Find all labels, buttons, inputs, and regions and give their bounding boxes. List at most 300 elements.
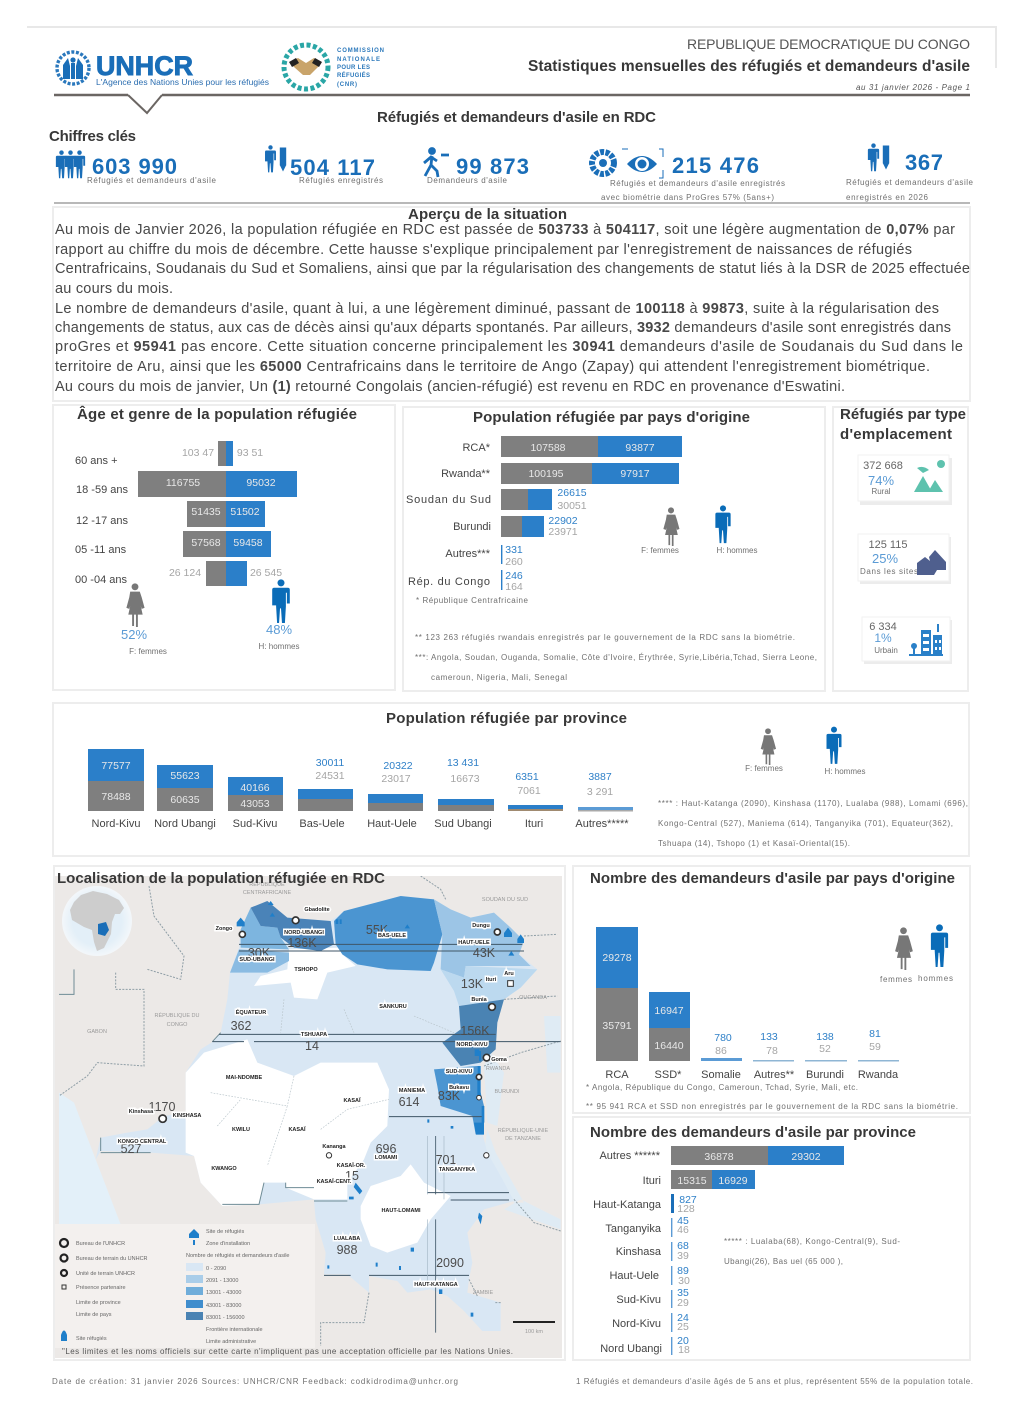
refugee count labels: 30K bbox=[248, 946, 271, 960]
refugee count labels: 1170 bbox=[149, 1100, 175, 1114]
stacked bar chart: Nord Ubangi bbox=[600, 1343, 662, 1355]
card: rural: 74% bbox=[868, 473, 894, 488]
stacked bar chart: 30 bbox=[678, 1275, 690, 1287]
logo: UNHCR: UNHCR bbox=[96, 51, 193, 81]
text block: changements de status, aux cas de décès ainsi qu'aux départs spontanés. Par ailleurs, 3932 demandeurs d'asile sont enregistrés dans bbox=[55, 320, 951, 336]
stacked column chart: 29278 bbox=[602, 952, 632, 964]
stacked column chart: 59 bbox=[869, 1041, 881, 1053]
stacked column chart: Autres** bbox=[754, 1069, 795, 1081]
stacked column chart: Sud-Kivu bbox=[233, 818, 277, 830]
stacked bar chart: 35 bbox=[677, 1287, 689, 1299]
stacked bar chart: 246 bbox=[505, 570, 523, 582]
stacked bar chart: 15315 bbox=[677, 1175, 707, 1187]
stacked column chart: 138 bbox=[816, 1031, 834, 1043]
stacked column chart: Burundi bbox=[806, 1069, 844, 1081]
stacked bar chart: RCA* bbox=[462, 442, 491, 454]
kpi: registered in 2026: enregistrés en 2026 bbox=[846, 193, 929, 202]
legend icons bbox=[641, 505, 757, 555]
stacked bar chart: 128 bbox=[677, 1203, 695, 1215]
logo: commission nationale pour les réfugiés: (CNR) bbox=[337, 82, 357, 88]
stacked bar chart: Haut-Katanga bbox=[593, 1199, 662, 1211]
stacked column chart: 52 bbox=[819, 1043, 831, 1055]
stacked column chart: 60635 bbox=[170, 794, 200, 806]
text block: Au mois de Janvier 2026, la population réfugiée en RDC est passée de 503733 à 504117, soit une légère augmentation de 0,07% par bbox=[55, 222, 955, 238]
footnote: Kongo-Central (527), Maniema (614), Tanganyika (701), Equateur(362), bbox=[658, 819, 953, 828]
province labels: Goma bbox=[491, 1057, 508, 1063]
footer: sources: Date de création: 31 janvier 2026 Sources: UNHCR/CNR Feedback: codkidrodima@unhcr.org bbox=[52, 1377, 458, 1386]
share labels bbox=[121, 622, 299, 656]
header titles: Statistiques mensuelles des réfugiés et demandeurs d'asile bbox=[528, 58, 970, 75]
refugee count labels: 614 bbox=[399, 1095, 419, 1109]
frontier strokes bbox=[59, 969, 347, 1204]
logo: commission nationale pour les réfugiés: RÉFUGIÉS bbox=[337, 71, 370, 79]
legend icons: H: hommes bbox=[825, 767, 865, 776]
stacked column chart: 40166 bbox=[240, 782, 270, 794]
stacked bar chart: Rwanda** bbox=[441, 468, 491, 480]
pyramid chart: 116755 bbox=[166, 477, 200, 489]
text block: territoire de Aru, ainsi que les 65000 Centrafricains dans le territoire de Ango (Zapay) qui attendent l'enregistrement biométrique. bbox=[55, 359, 930, 375]
legend icons: hommes bbox=[918, 974, 953, 983]
legend: Bureau de terrain du UNHCR bbox=[76, 1256, 148, 1262]
neighbouring country labels: OUGANDA bbox=[519, 995, 547, 1001]
stacked column chart: 55623 bbox=[170, 770, 200, 782]
province labels: Bukavu bbox=[449, 1085, 469, 1091]
pyramid chart: 103 47 bbox=[182, 447, 214, 459]
heading: d'emplacement bbox=[840, 426, 952, 443]
province labels: HAUT-LOMAMI bbox=[381, 1208, 421, 1214]
pyramid chart: 51435 bbox=[191, 506, 221, 518]
stacked column chart: 78488 bbox=[101, 791, 131, 803]
legend: Site de réfugiés bbox=[206, 1229, 244, 1235]
legend: Zone d'installation bbox=[206, 1241, 250, 1247]
stacked bar chart: 29302 bbox=[791, 1151, 821, 1163]
legend icons bbox=[745, 727, 865, 776]
neighbouring country labels: RWANDA bbox=[486, 1066, 510, 1072]
heading: chiffres clés: Chiffres clés bbox=[49, 128, 136, 145]
text block: Le nombre de demandeurs d'asile, quant à lui, a une légèrement diminué, passant de 100118 à 99873, suite à la régularisation des bbox=[55, 301, 939, 317]
stacked bar chart: 45 bbox=[677, 1215, 689, 1227]
card: rural: 372 668 bbox=[863, 460, 903, 472]
legend: 83001 - 156000 bbox=[206, 1315, 245, 1321]
icon: city bbox=[909, 624, 943, 656]
province labels: SUD-KIVU bbox=[446, 1069, 472, 1075]
kpi: biometric registration: Réfugiés et demandeurs d'asile enregistrés bbox=[610, 179, 785, 188]
panel: asylum seekers by province bbox=[573, 1117, 970, 1360]
heading: Réfugiés par type bbox=[840, 406, 966, 423]
refugee count labels: 2090 bbox=[436, 1256, 464, 1270]
footnotes: * République Centrafricaine bbox=[416, 596, 529, 605]
province labels: KASAÏ bbox=[343, 1097, 361, 1104]
province labels: MAI-NDOMBE bbox=[226, 1075, 263, 1081]
stacked column chart: 77577 bbox=[101, 760, 131, 772]
stacked bar chart: 23971 bbox=[548, 526, 578, 538]
legend: Unité de terrain UNHCR bbox=[76, 1271, 135, 1277]
province labels: KASAÏ-CENT. bbox=[317, 1178, 352, 1185]
heading: Localisation de la population réfugiée en RDC bbox=[57, 870, 385, 887]
kpi: registered refugees: Réfugiés enregistrés bbox=[299, 176, 383, 185]
legend: Site réfugiés bbox=[76, 1336, 107, 1342]
pyramid chart: 59458 bbox=[233, 537, 263, 549]
stacked bar chart: Sud-Kivu bbox=[616, 1294, 661, 1306]
legend: 43001 - 83000 bbox=[206, 1303, 241, 1309]
stacked bar chart: 260 bbox=[505, 556, 523, 568]
pyramid chart: 05 -11 ans bbox=[75, 544, 127, 556]
stacked column chart: 13 431 bbox=[447, 757, 479, 769]
legend: Nombre de réfugiés et demandeurs d'asile bbox=[186, 1253, 289, 1259]
heading bbox=[840, 406, 966, 443]
ocean and lakes bbox=[59, 1093, 121, 1224]
logo: UNHCR bbox=[57, 51, 269, 87]
province labels: TSHOPO bbox=[294, 967, 318, 973]
text block: rapport au chiffre du mois de décembre. Cette hausse s'explique principalement par l'enregistrement de naissances de réfugiés bbox=[55, 242, 912, 258]
logo: commission nationale pour les réfugiés bbox=[284, 45, 384, 89]
stacked bar chart: Soudan du Sud bbox=[406, 494, 491, 506]
sites markers bbox=[237, 901, 524, 1317]
legend icons: femmes bbox=[880, 975, 912, 984]
share labels: H: hommes bbox=[259, 642, 299, 651]
kpi: refugees and asylum seekers: 603 990 bbox=[92, 154, 177, 179]
stacked column chart: 35791 bbox=[602, 1020, 632, 1032]
province labels: HAUT-UELE bbox=[458, 940, 490, 946]
leader lines bbox=[212, 944, 561, 1333]
neighbouring country labels: ZAMBIE bbox=[473, 1290, 494, 1296]
legend bbox=[55, 1224, 555, 1348]
pyramid chart bbox=[75, 441, 297, 586]
kpi: asylum seekers: 99 873 bbox=[456, 154, 529, 179]
stacked bar chart: 25 bbox=[677, 1321, 689, 1333]
province labels: KWILU bbox=[232, 1127, 250, 1133]
legend: 13001 - 43000 bbox=[206, 1290, 241, 1296]
text block: proGres et 95941 pas encore. Cette situation concerne principalement les 30941 demandeurs d'asile de Soudanais du Sud dans le bbox=[55, 339, 963, 355]
icon: walking person and arrow bbox=[424, 148, 449, 177]
footer: note: 1 Réfugiés et demandeurs d'asile âgés de 5 ans et plus, représentent 55% de la population totale. bbox=[576, 1377, 973, 1386]
stacked column chart: 24531 bbox=[315, 770, 345, 782]
province labels: Gbadolite bbox=[304, 907, 330, 913]
province labels: Ituri bbox=[486, 977, 497, 983]
footnote bbox=[658, 799, 968, 848]
legend: 2091 - 13000 bbox=[206, 1278, 238, 1284]
stacked bar chart: 46 bbox=[677, 1224, 689, 1236]
pyramid chart: 26 545 bbox=[250, 567, 282, 579]
refugee count labels: 13K bbox=[461, 977, 484, 991]
kpi: asylum seekers: Demandeurs d'asile bbox=[427, 176, 508, 185]
stacked bar chart bbox=[406, 436, 682, 593]
footnotes: ** 123 263 réfugiés rwandais enregistrés par le gouvernement de la RDC sans la biométrie. bbox=[415, 633, 795, 642]
legend: Limite administrative bbox=[206, 1339, 256, 1345]
map bbox=[55, 876, 562, 1358]
stacked column chart: 16673 bbox=[450, 773, 480, 785]
province labels: Dungu bbox=[472, 923, 490, 929]
refugee count labels: 701 bbox=[436, 1153, 456, 1167]
legend: 0 - 2090 bbox=[206, 1266, 226, 1272]
province labels: SUD-UBANGI bbox=[239, 957, 275, 963]
panel: by location type bbox=[833, 406, 968, 691]
refugee count labels: 15 bbox=[345, 1169, 359, 1183]
kpi: registered in 2026: Réfugiés et demandeurs d'asile bbox=[846, 178, 974, 187]
neighbouring country labels: DE TANZANIE bbox=[505, 1136, 541, 1142]
province labels: KONGO CENTRAL bbox=[118, 1139, 167, 1145]
pyramid chart: 95032 bbox=[246, 477, 276, 489]
legend icons: H: hommes bbox=[717, 546, 757, 555]
province labels: KASAÏ bbox=[288, 1126, 306, 1133]
stacked bar chart: Burundi bbox=[453, 521, 491, 533]
stacked column chart: Ituri bbox=[525, 818, 543, 830]
province labels: TSHUAPA bbox=[301, 1032, 327, 1038]
header titles: au 31 janvier 2026 - Page 1 bbox=[856, 83, 970, 92]
refugee count labels bbox=[121, 923, 496, 1270]
heading: Population réfugiée par pays d'origine bbox=[473, 409, 750, 426]
globe inset bbox=[62, 886, 132, 956]
province labels: BAS-UELE bbox=[378, 933, 406, 939]
refugee count labels: 696 bbox=[376, 1142, 396, 1156]
panel: age and gender bbox=[53, 405, 395, 690]
stacked column chart: 16947 bbox=[654, 1005, 684, 1017]
heading: Aperçu de la situation bbox=[408, 206, 567, 223]
stacked column chart: RCA bbox=[605, 1069, 629, 1081]
legend: Limite de pays bbox=[76, 1312, 112, 1318]
stacked column chart: 133 bbox=[760, 1031, 778, 1043]
pyramid chart: 93 51 bbox=[237, 447, 263, 459]
logo: UNHCR: L'Agence des Nations Unies pour les réfugiés bbox=[96, 77, 269, 87]
neighbouring country labels: SOUDAN DU SUD bbox=[482, 897, 528, 903]
panel: asylum seekers by origin bbox=[573, 866, 970, 1113]
stacked column chart: 7061 bbox=[517, 785, 541, 797]
stacked bar chart: 331 bbox=[505, 544, 523, 556]
pyramid chart: 51502 bbox=[230, 506, 260, 518]
footnote bbox=[724, 1237, 900, 1266]
neighbouring country labels: CENTRAFRICAINE bbox=[243, 890, 291, 896]
logo: commission nationale pour les réfugiés: COMMISSION bbox=[337, 48, 384, 54]
subtitle: Réfugiés et demandeurs d'asile en RDC bbox=[377, 109, 656, 126]
country bbox=[96, 896, 537, 1331]
text block: Au cours du mois de janvier, Un (1) retourné Congolais (ancien-réfugié) est revenu en RDC en provenance d'Eswatini. bbox=[55, 379, 845, 395]
stacked bar chart: 100195 bbox=[528, 468, 564, 480]
neighbouring country labels bbox=[87, 881, 549, 1296]
province labels bbox=[118, 907, 514, 1288]
stacked column chart: 23017 bbox=[381, 773, 411, 785]
kpi: biometric registration: avec biométrie dans ProGres 57% (5ans+) bbox=[601, 193, 774, 202]
kpi: registered in 2026: 367 bbox=[905, 150, 943, 175]
icon: person and pencil bbox=[265, 145, 286, 172]
province labels: KINSHASA bbox=[173, 1113, 201, 1119]
province labels: KASAÏ-OR. bbox=[337, 1162, 366, 1169]
icon: group of people bbox=[56, 150, 85, 178]
pyramid chart: 60 ans + bbox=[75, 455, 118, 467]
share labels: F: femmes bbox=[129, 647, 167, 656]
province labels: MANIEMA bbox=[399, 1088, 425, 1094]
neighbouring country labels: BURUNDI bbox=[494, 1089, 520, 1095]
card: sites: 125 115 bbox=[869, 539, 907, 551]
pyramid chart: 12 -17 ans bbox=[76, 515, 128, 527]
province labels: NORD-KIVU bbox=[456, 1042, 488, 1048]
stacked column chart: Nord Ubangi bbox=[154, 818, 216, 830]
footnote: Tshuapa (14), Tshopo (1) et Kasaï-Oriental(15). bbox=[658, 839, 850, 848]
stacked column chart: 3887 bbox=[588, 771, 612, 783]
stacked column chart: SSD* bbox=[655, 1069, 682, 1081]
card: urban: 6 334 bbox=[869, 621, 897, 633]
borders bbox=[59, 876, 561, 1346]
kpi: biometric registration bbox=[592, 149, 785, 202]
province labels: Kananga bbox=[322, 1144, 347, 1150]
stacked bar chart: 89 bbox=[677, 1265, 689, 1277]
card: sites bbox=[858, 534, 951, 584]
legend icons bbox=[880, 924, 953, 984]
heading: Nombre des demandeurs d'asile par province bbox=[590, 1124, 916, 1141]
footnote: ***** : Lualaba(68), Kongo-Central(9), Sud- bbox=[724, 1237, 900, 1246]
stacked column chart: Nord-Kivu bbox=[92, 818, 140, 830]
legend icons: F: femmes bbox=[641, 546, 679, 555]
stacked bar chart: 827 bbox=[679, 1194, 697, 1206]
stacked bar chart: Autres*** bbox=[445, 548, 491, 560]
footnotes bbox=[415, 596, 817, 682]
stacked column chart: 16440 bbox=[654, 1040, 684, 1052]
refugee count labels: 83K bbox=[438, 1089, 461, 1103]
header titles: REPUBLIQUE DEMOCRATIQUE DU CONGO bbox=[687, 36, 970, 52]
card: urban bbox=[862, 617, 952, 664]
panel: refugees by province bbox=[53, 703, 969, 856]
footnote: Ubangi(26), Bas uel (65 000 ), bbox=[724, 1257, 843, 1266]
footnotes: ** 95 941 RCA et SSD non enregistrés par le gouvernement de la RDC sans la biométrie. bbox=[586, 1102, 958, 1111]
province labels: Bunia bbox=[471, 997, 488, 1003]
icon: woman bbox=[126, 583, 145, 627]
legend: Limite de province bbox=[76, 1300, 121, 1306]
kpi: registered refugees: 504 117 bbox=[290, 155, 375, 180]
page frame bbox=[27, 27, 996, 68]
stacked bar chart: Rép. du Congo bbox=[408, 576, 490, 588]
province labels: LOMAMI bbox=[375, 1155, 398, 1161]
stacked column chart: 78 bbox=[766, 1045, 778, 1057]
neighbouring country labels: RÉPUBLIQUE bbox=[249, 881, 285, 888]
text block: Centrafricains, Soudanais du Sud et Somaliens, ainsi que par la régularisation des changements de statut liés à la DSR de 2025 effectuée bbox=[55, 261, 970, 277]
card: rural: Rural bbox=[871, 487, 891, 496]
card: urban: 1% bbox=[874, 631, 892, 645]
share labels: 48% bbox=[266, 622, 292, 637]
stacked bar chart: 39 bbox=[677, 1250, 689, 1262]
stacked bar chart bbox=[593, 1146, 844, 1356]
footnote: **** : Haut-Katanga (2090), Kinshasa (1170), Lualaba (988), Lomami (696), bbox=[658, 799, 968, 808]
neighbouring country labels: CONGO bbox=[167, 1022, 188, 1028]
text block bbox=[55, 222, 970, 395]
neighbouring country labels: RÉPUBLIQUE DU bbox=[155, 1012, 199, 1019]
divider bbox=[54, 202, 970, 204]
map disclaimer: "Les limites et les noms officiels sur cette carte n'impliquent pas une acceptation officielle par les Nations Unies. bbox=[62, 1347, 513, 1356]
stacked column chart: Autres***** bbox=[575, 818, 629, 830]
province labels: HAUT-KATANGA bbox=[414, 1282, 458, 1288]
province labels: SANKURU bbox=[379, 1004, 407, 1010]
panel: situation overview bbox=[53, 206, 970, 401]
stacked bar chart: 16929 bbox=[718, 1175, 748, 1187]
footnotes: cameroun, Nigeria, Mali, Senegal bbox=[431, 673, 567, 682]
logo: commission nationale pour les réfugiés: POUR LES bbox=[337, 65, 370, 71]
stacked bar chart: Ituri bbox=[643, 1175, 661, 1187]
refugee count labels: 14 bbox=[305, 1039, 319, 1053]
header rule with chevron bbox=[54, 95, 970, 113]
icon: person and pencil bbox=[868, 143, 889, 171]
pyramid chart: 57568 bbox=[191, 537, 221, 549]
refugee count labels: 362 bbox=[231, 1019, 251, 1033]
stacked bar chart: Haut-Uele bbox=[609, 1270, 659, 1282]
icon: houses bbox=[917, 550, 946, 575]
stacked bar chart: Autres ****** bbox=[599, 1150, 661, 1162]
stacked column chart: 6351 bbox=[515, 771, 539, 783]
kpi: biometric registration: 215 476 bbox=[672, 153, 759, 178]
stacked bar chart: Nord-Kivu bbox=[612, 1318, 661, 1330]
stacked bar chart: 26615 bbox=[557, 487, 587, 499]
footnotes: ***: Angola, Soudan, Ouganda, Somalie, Côte d'Ivoire, Érythrée, Syrie,Libéria,Tchad, Sierra Leone, bbox=[415, 653, 817, 662]
neighbouring country labels: RÉPUBLIQUE-UNIE bbox=[498, 1127, 549, 1134]
pyramid chart: 00 -04 ans bbox=[75, 574, 127, 586]
stacked column chart: 780 bbox=[714, 1032, 732, 1044]
province labels: NORD-UBANGI bbox=[284, 930, 324, 936]
stacked bar chart: Tanganyika bbox=[605, 1223, 662, 1235]
stacked bar chart: 93877 bbox=[625, 442, 655, 454]
kpi: refugees and asylum seekers bbox=[56, 150, 217, 185]
refugee count labels: 43K bbox=[473, 946, 496, 960]
stacked bar chart: 30051 bbox=[557, 500, 587, 512]
pyramid chart: 18 -59 ans bbox=[76, 484, 128, 496]
kpi: registered in 2026 bbox=[846, 143, 974, 202]
refugee count labels: 156K bbox=[460, 1024, 490, 1038]
stacked column chart: 43053 bbox=[240, 798, 270, 810]
stacked bar chart: 164 bbox=[505, 581, 523, 593]
offices bbox=[159, 917, 513, 1158]
province labels: LUALABA bbox=[334, 1236, 360, 1242]
stacked column chart: 30011 bbox=[316, 757, 344, 769]
stacked column chart: 86 bbox=[715, 1045, 727, 1057]
card: sites: 25% bbox=[872, 551, 898, 566]
kpi: refugees and asylum seekers: Réfugiés et demandeurs d'asile bbox=[87, 176, 217, 185]
stacked column chart: 20322 bbox=[383, 760, 413, 772]
stacked bar chart: 24 bbox=[677, 1312, 689, 1324]
legend: Présence partenaire bbox=[76, 1285, 126, 1291]
card: urban: Urbain bbox=[874, 646, 898, 655]
stacked column chart: Bas-Uele bbox=[299, 818, 345, 830]
province labels: Kinshasa bbox=[129, 1109, 154, 1115]
share labels: 52% bbox=[121, 627, 147, 642]
stacked column chart bbox=[596, 927, 899, 1081]
legend: Frontière internationale bbox=[206, 1327, 263, 1333]
stacked column chart: 81 bbox=[869, 1028, 881, 1040]
refugee count labels: 988 bbox=[337, 1243, 357, 1257]
logo: commission nationale pour les réfugiés: NATIONALE bbox=[337, 57, 380, 63]
neighbouring country labels: GABON bbox=[87, 1029, 107, 1035]
province labels: KWANGO bbox=[211, 1166, 237, 1172]
footnotes bbox=[586, 1083, 958, 1111]
stacked bar chart: 29 bbox=[677, 1297, 689, 1309]
heading: Nombre des demandeurs d'asile par pays d'origine bbox=[590, 870, 955, 887]
heading: Âge et genre de la population réfugiée bbox=[77, 405, 357, 423]
footnotes: * Angola, République du Congo, Cameroun, Tchad, Syrie, Mali, etc. bbox=[586, 1083, 858, 1092]
stacked bar chart: 36878 bbox=[704, 1151, 734, 1163]
kpi: asylum seekers bbox=[424, 148, 529, 185]
icon: mountains bbox=[914, 460, 945, 492]
icon: man bbox=[272, 579, 290, 623]
kpi: registered refugees bbox=[265, 145, 383, 185]
stacked bar chart: 107588 bbox=[530, 442, 566, 454]
card: rural bbox=[858, 455, 952, 505]
legend: 100 km bbox=[525, 1329, 543, 1335]
legend icons: F: femmes bbox=[745, 764, 783, 773]
text block: au cours du mois. bbox=[55, 281, 173, 297]
panel: refugees by origin bbox=[403, 407, 825, 691]
province labels: Aru bbox=[504, 971, 514, 977]
icon: fingerprint and eye bbox=[592, 149, 663, 178]
legend: Bureau de l'UNHCR bbox=[76, 1241, 125, 1247]
heading: Population réfugiée par province bbox=[386, 710, 627, 727]
stacked column chart: Rwanda bbox=[858, 1069, 899, 1081]
stacked column chart: 3 291 bbox=[587, 786, 613, 798]
pyramid chart: 26 124 bbox=[169, 567, 201, 579]
